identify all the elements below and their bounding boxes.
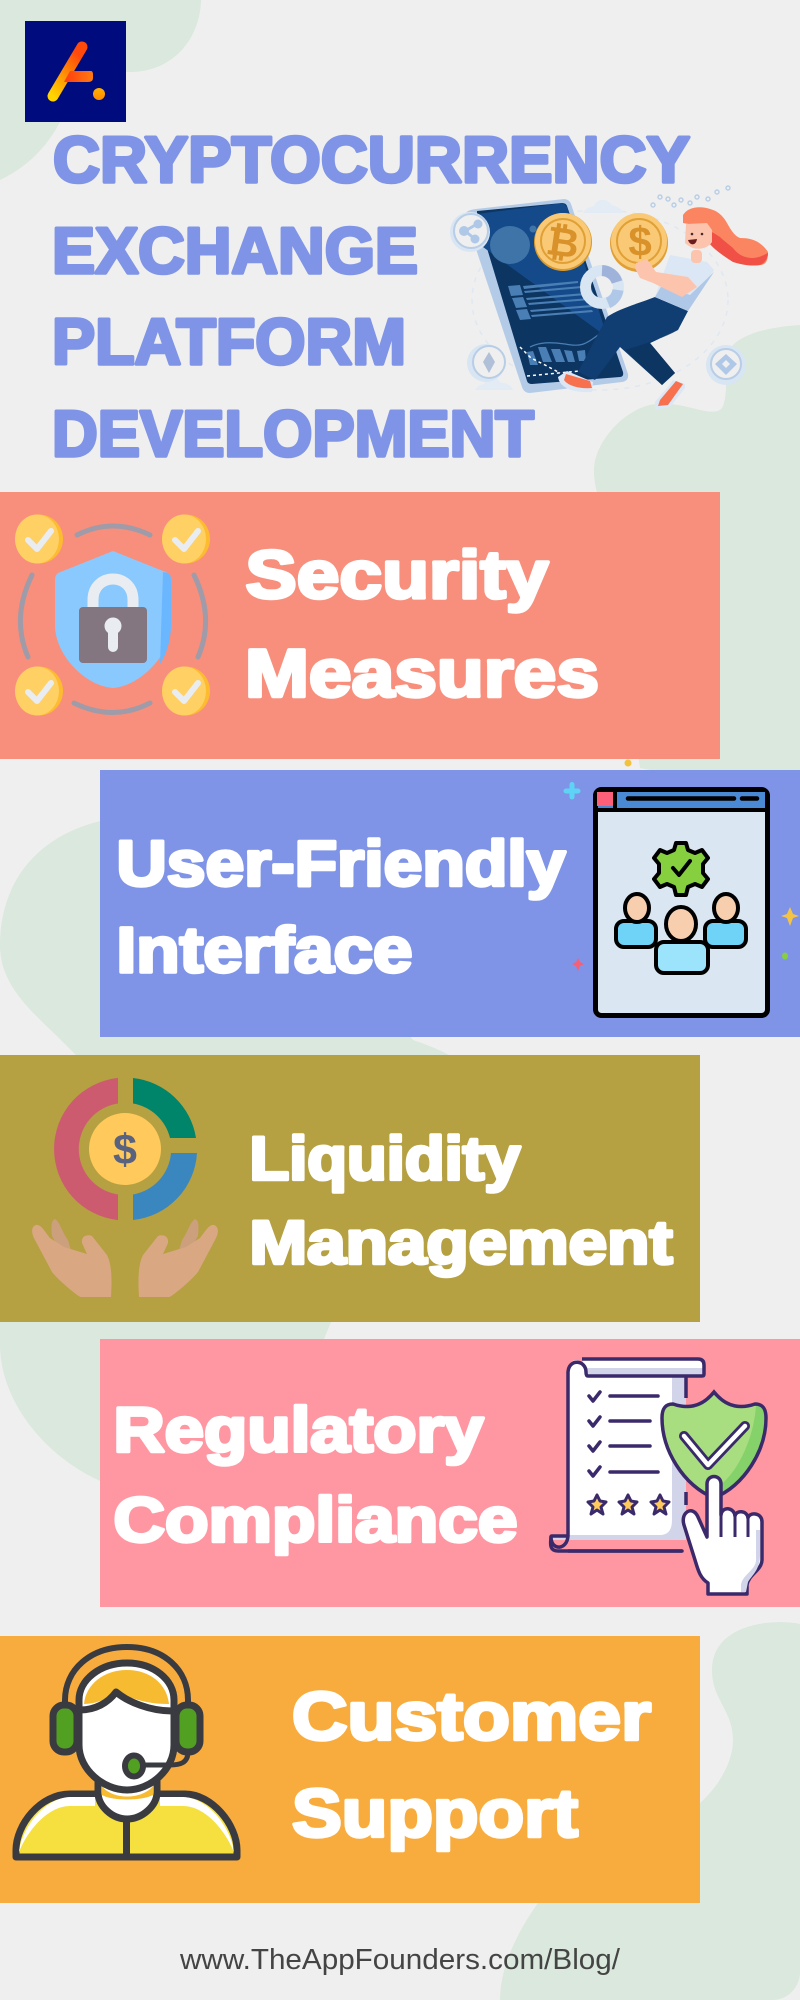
title: CRYPTOCURRENCY bbox=[53, 123, 690, 196]
ripple coin bbox=[450, 212, 490, 252]
icon: sparkles bbox=[564, 782, 799, 971]
body bbox=[16, 1794, 237, 1857]
heading: security measures: Measures bbox=[245, 636, 599, 712]
ethereum coin bbox=[467, 344, 505, 382]
heading: security measures: Security bbox=[246, 537, 549, 613]
neck and face bbox=[691, 250, 702, 263]
stars bbox=[588, 1495, 669, 1514]
woman bbox=[558, 207, 768, 410]
footer url: www.TheAppFounders.com/Blog/ bbox=[179, 1944, 621, 1976]
centre person bbox=[656, 942, 708, 973]
icon: checklist scroll with shield and hand bbox=[551, 1359, 766, 1594]
heading: security measures bbox=[245, 537, 599, 712]
binance coin bbox=[706, 345, 746, 385]
shirt bbox=[655, 255, 714, 311]
heading: user-friendly interface: User-Friendly bbox=[116, 828, 566, 900]
hair back bbox=[683, 207, 768, 265]
heading: regulatory compliance: Regulatory bbox=[114, 1396, 484, 1466]
heading: liquidity management: Liquidity bbox=[250, 1124, 521, 1192]
panel: security measures bbox=[0, 492, 720, 759]
dollar coin bbox=[610, 214, 668, 272]
floating dots bbox=[651, 186, 730, 207]
heading: liquidity management: Management bbox=[250, 1208, 672, 1276]
arm and hand bbox=[635, 259, 697, 297]
illustration: phone with coins and woman: ₿ bbox=[543, 218, 582, 268]
heading: customer support: Support bbox=[292, 1776, 578, 1852]
heading: liquidity management bbox=[250, 1124, 672, 1276]
phone body bbox=[465, 199, 628, 393]
heading: customer support bbox=[292, 1678, 651, 1852]
right person bbox=[705, 921, 746, 947]
left person bbox=[616, 921, 656, 947]
heading: customer support: Customer bbox=[292, 1678, 651, 1754]
right shoe bbox=[655, 380, 685, 410]
illustration: phone with coins and woman: $ bbox=[628, 218, 652, 265]
panel: user-friendly interface bbox=[100, 770, 800, 1037]
icon: headset agent bbox=[16, 1647, 237, 1858]
jeans bbox=[578, 297, 688, 385]
icon: coin ring and hands: $ bbox=[113, 1126, 137, 1174]
illustration: phone with coins and woman bbox=[450, 186, 768, 410]
neck bbox=[98, 1775, 157, 1819]
title: EXCHANGE bbox=[52, 214, 418, 287]
panel: regulatory compliance bbox=[100, 1339, 800, 1607]
heading: user-friendly interface bbox=[116, 828, 566, 986]
title: PLATFORM bbox=[52, 305, 406, 378]
hair bbox=[84, 1670, 169, 1704]
icon: coin ring and hands bbox=[32, 1078, 218, 1297]
left shoe bbox=[558, 371, 593, 392]
bitcoin coin bbox=[534, 213, 592, 271]
phone screen rows bbox=[508, 281, 593, 365]
headband bbox=[65, 1647, 188, 1705]
pointing hand bbox=[683, 1476, 762, 1594]
icon: shield with padlock bbox=[15, 514, 210, 716]
heading: user-friendly interface: Interface bbox=[116, 914, 412, 986]
gear bbox=[654, 843, 708, 895]
shield bbox=[662, 1392, 766, 1498]
logo bbox=[25, 21, 126, 122]
dashed orbit bbox=[472, 210, 728, 390]
panel: customer support bbox=[0, 1636, 700, 1903]
heading: regulatory compliance: Compliance bbox=[114, 1486, 518, 1556]
icon: app window with team bbox=[596, 790, 768, 1016]
head bbox=[79, 1663, 174, 1790]
panel: liquidity management bbox=[0, 1055, 700, 1322]
donut chart bbox=[586, 270, 618, 304]
title bbox=[52, 123, 690, 470]
decorative yellow dot bbox=[624, 760, 632, 766]
checklist bbox=[589, 1392, 658, 1476]
scroll bbox=[568, 1360, 686, 1536]
ear cups bbox=[53, 1705, 77, 1752]
microphone bbox=[140, 1752, 188, 1765]
clouds bbox=[475, 200, 623, 390]
heading: regulatory compliance bbox=[114, 1396, 518, 1556]
title: DEVELOPMENT bbox=[52, 397, 534, 470]
